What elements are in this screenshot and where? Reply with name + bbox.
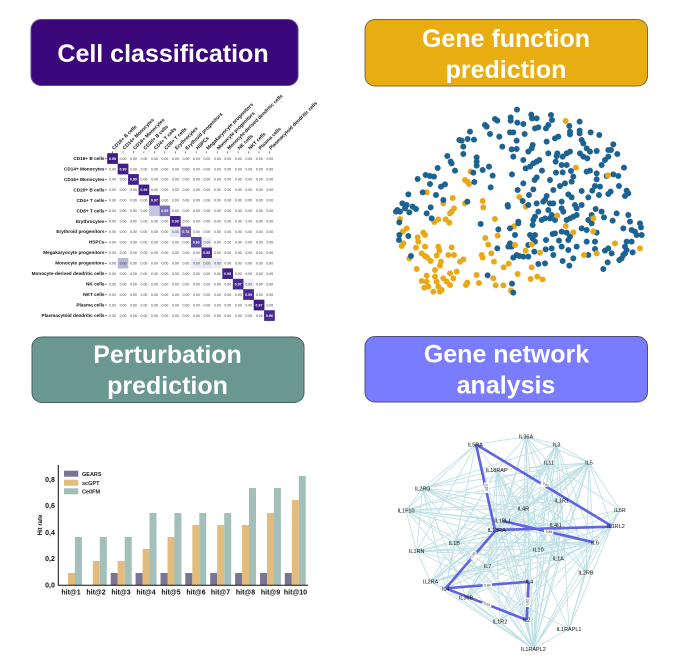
- legend: scGPT: [82, 481, 100, 487]
- legend: CellFM: [82, 490, 100, 496]
- row labels: CD16+ B cells: [73, 156, 105, 161]
- node labels: IL11: [544, 461, 554, 467]
- column labels: Plasma cells: [258, 126, 283, 151]
- diagonal values: [107, 153, 275, 321]
- node labels: IL1B: [449, 541, 460, 547]
- node labels: IL4: [526, 580, 533, 586]
- cell values: 0.00 0.00 0.00 0.00 0.00 0.00 0.00 0.00 0.00 0.00 0.00 0.00 0.00 0.00 0.00 0.00: [109, 240, 273, 244]
- node labels: IL18RAP: [486, 468, 508, 474]
- column labels: Monocyte-derived dendritic cells: [226, 93, 285, 151]
- node labels: IL1R2: [493, 620, 507, 626]
- x-axis ticks: hit@10: [284, 590, 307, 596]
- cell values: 0.00 0.00 0.00 0.00 0.00 0.00 0.00 0.00 0.00 0.00 0.00 0.00 0.00 0.00 0.00 0.00: [109, 282, 273, 286]
- heading: Perturbation prediction: Perturbation: [93, 341, 242, 369]
- heading: Gene function prediction: Gene function: [422, 25, 590, 53]
- node labels: IL3: [553, 442, 560, 448]
- column labels: Erythroid progenitors: [184, 111, 224, 151]
- column labels: CD8+ T cells: [163, 126, 189, 151]
- edge weights: 0.82: [525, 599, 529, 606]
- x-axis ticks: hit@2: [86, 590, 106, 596]
- cell values: 0.00 0.00 0.00 0.00 0.00 0.00 0.00 0.00 0.00 0.00 0.00 0.00 0.00 0.00 0.00 0.00: [109, 199, 273, 203]
- diagonal values: 0.99: [120, 167, 126, 171]
- node labels: [397, 435, 626, 653]
- row labels: Erythrocytes: [76, 219, 105, 224]
- cell values: 0.00 0.00 0.00 0.00 0.00 0.00 0.00 0.00 0.00 0.00 0.00 0.00 0.00 0.00 0.00 0.00: [109, 209, 273, 213]
- node labels: IL10: [533, 547, 544, 553]
- node labels: IL1R1: [554, 499, 569, 505]
- node labels: IL1RN: [409, 549, 424, 555]
- heading: Gene network analysis: analysis: [457, 372, 555, 400]
- y-axis ticks: 0,6: [45, 503, 55, 510]
- node labels: IL5RA: [468, 442, 483, 448]
- x-axis ticks: hit@7: [211, 590, 230, 596]
- edge weights: 0.83: [470, 551, 477, 559]
- cell values: 0.00 0.00 0.00 0.00 0.00 0.00 0.00 0.00 0.00 0.00 0.00 0.00 0.00 0.00 0.00 0.00: [109, 272, 273, 276]
- column labels: [111, 93, 319, 151]
- column labels: NKT cells: [247, 131, 267, 151]
- node labels: IL6: [591, 540, 599, 546]
- heading: Gene network analysis: [365, 336, 648, 402]
- network graph: gene interactions: [397, 435, 626, 653]
- column labels: Megakaryocyte progenitors: [205, 102, 255, 151]
- row labels: CD8+ T cells: [76, 208, 105, 213]
- diagonal values: 0.97: [235, 282, 242, 286]
- edge weights: 0.85: [546, 530, 552, 534]
- edge weights: 0.84: [484, 583, 491, 587]
- diagonal values: 0.99: [130, 178, 137, 182]
- node labels: IL36B: [459, 596, 473, 602]
- y-axis ticks: 0,2: [45, 556, 55, 563]
- y-axis ticks: [45, 477, 55, 590]
- cell values: 0.00 0.00 0.00 0.00 0.00 0.00 0.00 0.00 0.00 0.00 0.00 0.00 0.00 0.00 0.00 0.00: [109, 157, 273, 161]
- y-axis ticks: 0,0: [45, 582, 55, 590]
- heading: Perturbation prediction: prediction: [107, 372, 228, 400]
- row labels: NK cells: [86, 282, 105, 287]
- column labels: CD20+ B cells: [143, 124, 170, 151]
- diagonal values: 0.69: [161, 209, 168, 213]
- column labels: Erythrocytes: [174, 126, 200, 151]
- row labels: Monocyte progenitors: [55, 261, 105, 266]
- cell values: 0.00 0.00 0.00 0.00 0.00 0.00 0.00 0.00 0.00 0.00 0.00 0.00 0.00 0.00 0.00 0.00: [109, 178, 273, 182]
- heatmap: cell classification confusion matrix: [32, 93, 319, 321]
- column labels: CD4+ T cells: [153, 126, 178, 151]
- y-axis title: Hit rate: [38, 514, 44, 535]
- x-axis ticks: [61, 590, 307, 596]
- node labels: IL36A: [519, 435, 533, 441]
- cell values: 0.00 0.00 0.00 0.00 0.00 0.00 0.00 0.00 0.00 0.00 0.00 0.00 0.00 0.00 0.00 0.00: [109, 188, 273, 192]
- row labels: [32, 156, 105, 318]
- bar chart: hit rate by method: [38, 465, 308, 596]
- diagonal values: 0.97: [256, 303, 262, 307]
- diagonal values: 0.98: [224, 272, 231, 276]
- node labels: IL6R: [614, 508, 626, 514]
- node labels: IL4R: [518, 507, 529, 513]
- heading: Perturbation prediction: [32, 337, 304, 402]
- legend: [64, 471, 102, 496]
- row labels: Plasma cells: [76, 302, 105, 308]
- column labels: CD16+ B cells: [111, 124, 139, 151]
- node labels: IL5: [585, 461, 593, 467]
- cell values: [109, 157, 273, 318]
- column labels: Monocyte progenitors: [216, 111, 257, 151]
- cell values: 0.00 0.00 0.00 0.00 0.00 0.00 0.00 0.00 0.00 0.00 0.00 0.00 0.00 0.00 0.00 0.00: [109, 262, 273, 266]
- cell values: 0.00 0.00 0.00 0.00 0.00 0.00 0.00 0.00 0.00 0.00 0.00 0.00 0.00 0.00 0.00 0.00: [109, 303, 273, 307]
- strong edges: [446, 444, 612, 620]
- edge weights: [470, 481, 553, 607]
- edge weights: 0.83: [485, 484, 489, 491]
- heading: Cell classification: Cell classification: [57, 40, 269, 68]
- node labels: IL7: [484, 564, 491, 570]
- scatter plot: gene function embedding: [396, 110, 642, 293]
- row labels: CD14+ Monocytes: [64, 166, 105, 171]
- y-axis ticks: 0,4: [45, 530, 55, 537]
- cell values: 0.00 0.00 0.00 0.00 0.00 0.00 0.00 0.00 0.00 0.00 0.00 0.00 0.00 0.00 0.00 0.00: [109, 314, 273, 318]
- diagonal values: 0.96: [266, 314, 273, 318]
- cell values: 0.00 0.00 0.00 0.00 0.00 0.00 0.00 0.00 0.00 0.00 0.00 0.00 0.00 0.00 0.00 0.00: [109, 220, 273, 224]
- y-axis ticks: 0,8: [45, 477, 55, 484]
- diagonal values: 0.78: [182, 230, 189, 234]
- chart axes: [58, 465, 308, 585]
- node labels: IL1RL2: [607, 524, 625, 530]
- x-axis ticks: hit@3: [111, 590, 131, 596]
- node labels: IL18L1: [494, 519, 511, 525]
- row labels: NKT cells: [83, 292, 105, 297]
- heading: Gene network analysis: Gene network: [424, 340, 589, 368]
- row labels: CD4+ T cells: [76, 198, 105, 203]
- node labels: IL2RB: [578, 570, 594, 576]
- x-axis ticks: hit@8: [236, 590, 255, 596]
- diagonal values: 0.99: [109, 157, 116, 161]
- node labels: IL1F10: [397, 508, 415, 514]
- x-axis ticks: hit@4: [136, 590, 156, 596]
- column labels: CD14+ Monocytes: [122, 117, 156, 151]
- diagonal values: 0.97: [151, 199, 158, 203]
- x-axis ticks: hit@5: [161, 590, 181, 596]
- column labels: CD16+ Monocytes: [132, 117, 166, 151]
- column labels: HSPCs: [195, 135, 211, 151]
- node labels: IL1A: [553, 557, 564, 563]
- heading: Gene function prediction: prediction: [446, 56, 566, 84]
- row labels: Erythroid progenitors: [56, 229, 105, 234]
- node labels: IL2RA: [423, 580, 439, 586]
- cell values: 0.00 0.00 0.00 0.00 0.00 0.00 0.00 0.00 0.00 0.00 0.00 0.00 0.00 0.00 0.00 0.00: [109, 230, 273, 234]
- column labels: NK cells: [237, 133, 255, 151]
- diagonal values: 0.95: [203, 251, 210, 255]
- row labels: HSPCs: [89, 240, 105, 245]
- node labels: IL4: [442, 586, 449, 592]
- heading: Gene function prediction: [365, 20, 648, 86]
- node labels: IL1RAPL1: [556, 627, 581, 633]
- x-axis ticks: hit@6: [186, 590, 206, 596]
- cell values: 0.00 0.00 0.00 0.00 0.00 0.00 0.00 0.00 0.00 0.00 0.00 0.00 0.00 0.00 0.00 0.00: [109, 293, 273, 297]
- edge weights: 0.83: [483, 601, 491, 607]
- row labels: Monocyte-derived dendritic cells: [32, 271, 105, 276]
- legend: GEARS: [82, 472, 102, 478]
- cell values: 0.00 0.00 0.00 0.00 0.00 0.00 0.00 0.00 0.00 0.00 0.00 0.00 0.00 0.00 0.00 0.00: [109, 167, 273, 171]
- x-axis ticks: hit@9: [261, 590, 280, 596]
- diagonal values: 0.99: [140, 188, 147, 192]
- column labels: Plasmacytoid dendritic cells: [268, 100, 319, 151]
- x-axis ticks: hit@1: [61, 590, 81, 596]
- row labels: Plasmacytoid dendritic cells: [41, 313, 105, 318]
- node labels: IL13RA: [488, 528, 506, 534]
- edge weights: 0.83: [542, 481, 550, 488]
- diagonal values: 0.95: [245, 293, 252, 297]
- node labels: IL1RAPL2: [521, 647, 546, 653]
- node labels: IL4I1: [550, 523, 562, 529]
- row labels: CD20+ B cells: [73, 187, 105, 192]
- diagonal values: 0.83: [193, 240, 200, 244]
- node labels: IL2: [523, 618, 530, 624]
- heading: Cell classification: [31, 20, 298, 86]
- row labels: CD16+ Monocytes: [64, 177, 105, 182]
- node labels: IL2RG: [415, 486, 431, 492]
- cell values: 0.00 0.00 0.00 0.00 0.00 0.00 0.00 0.00 0.00 0.00 0.00 0.00 0.00 0.00 0.00 0.00: [109, 251, 273, 255]
- row labels: Megakaryocyte progenitors: [43, 250, 105, 255]
- diagonal values: 0.98: [172, 220, 179, 224]
